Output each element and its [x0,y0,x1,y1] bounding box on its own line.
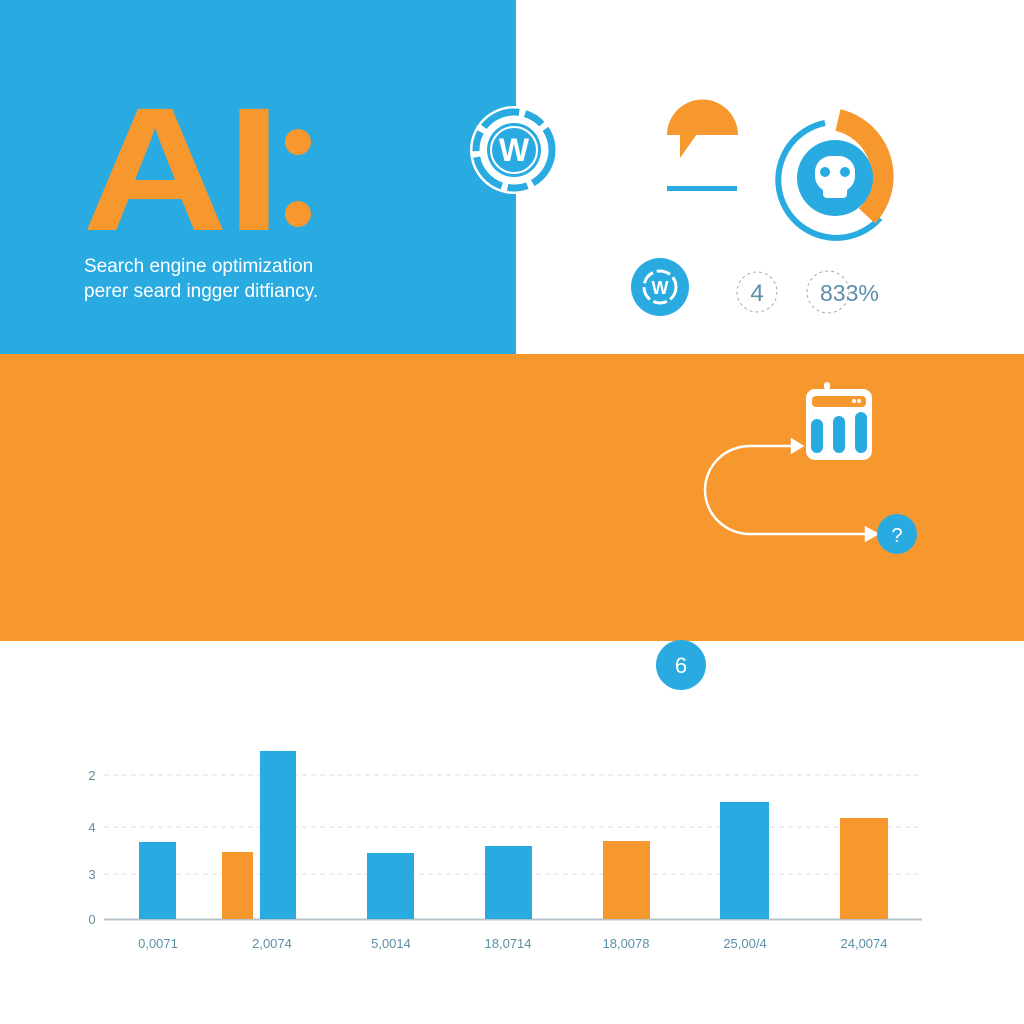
y-axis labels: 2 [88,768,96,783]
x-axis labels: 25,00/4 [723,936,767,951]
icon: wordpress small [631,258,689,316]
icon: wordpress small: W [652,278,668,298]
icon: question circle: ? [891,525,903,547]
subtitle text [84,256,318,302]
panel: orange band [0,354,1024,641]
badge: 6: 6 [675,653,687,678]
x-axis labels [138,936,888,951]
badge: 6 [656,640,706,690]
icon: chart window [806,382,872,460]
bar chart [88,751,922,951]
y-axis labels: 0 [88,912,96,927]
stat: 4: 4 [750,280,764,307]
x-axis labels: 18,0714 [484,936,532,951]
icon: wordpress large: W [499,132,530,168]
icon: wordpress large [470,106,558,194]
x-axis labels: 24,0074 [840,936,888,951]
x-axis labels: 2,0074 [252,936,292,951]
x-axis labels: 5,0014 [371,936,411,951]
bars [139,751,888,919]
title: AI [82,71,280,268]
x-axis labels: 0,0071 [138,936,178,951]
stat: 833%: 833% [820,280,879,306]
subtitle text: perer seard ingger ditfiancy. [84,281,318,302]
icon: speech bubble [667,100,738,191]
icon: donut with face [778,120,883,238]
arrow: curved flow [705,440,877,540]
panel: blue header [0,0,516,354]
stat: 833% [807,271,879,313]
y-axis labels [88,768,96,927]
icon: question circle [877,514,917,554]
y-axis labels: 4 [88,820,96,835]
stat: 4 [737,272,777,312]
y-axis labels: 3 [88,867,96,882]
subtitle text: Search engine optimization [84,256,313,277]
x-axis labels: 18,0078 [602,936,650,951]
